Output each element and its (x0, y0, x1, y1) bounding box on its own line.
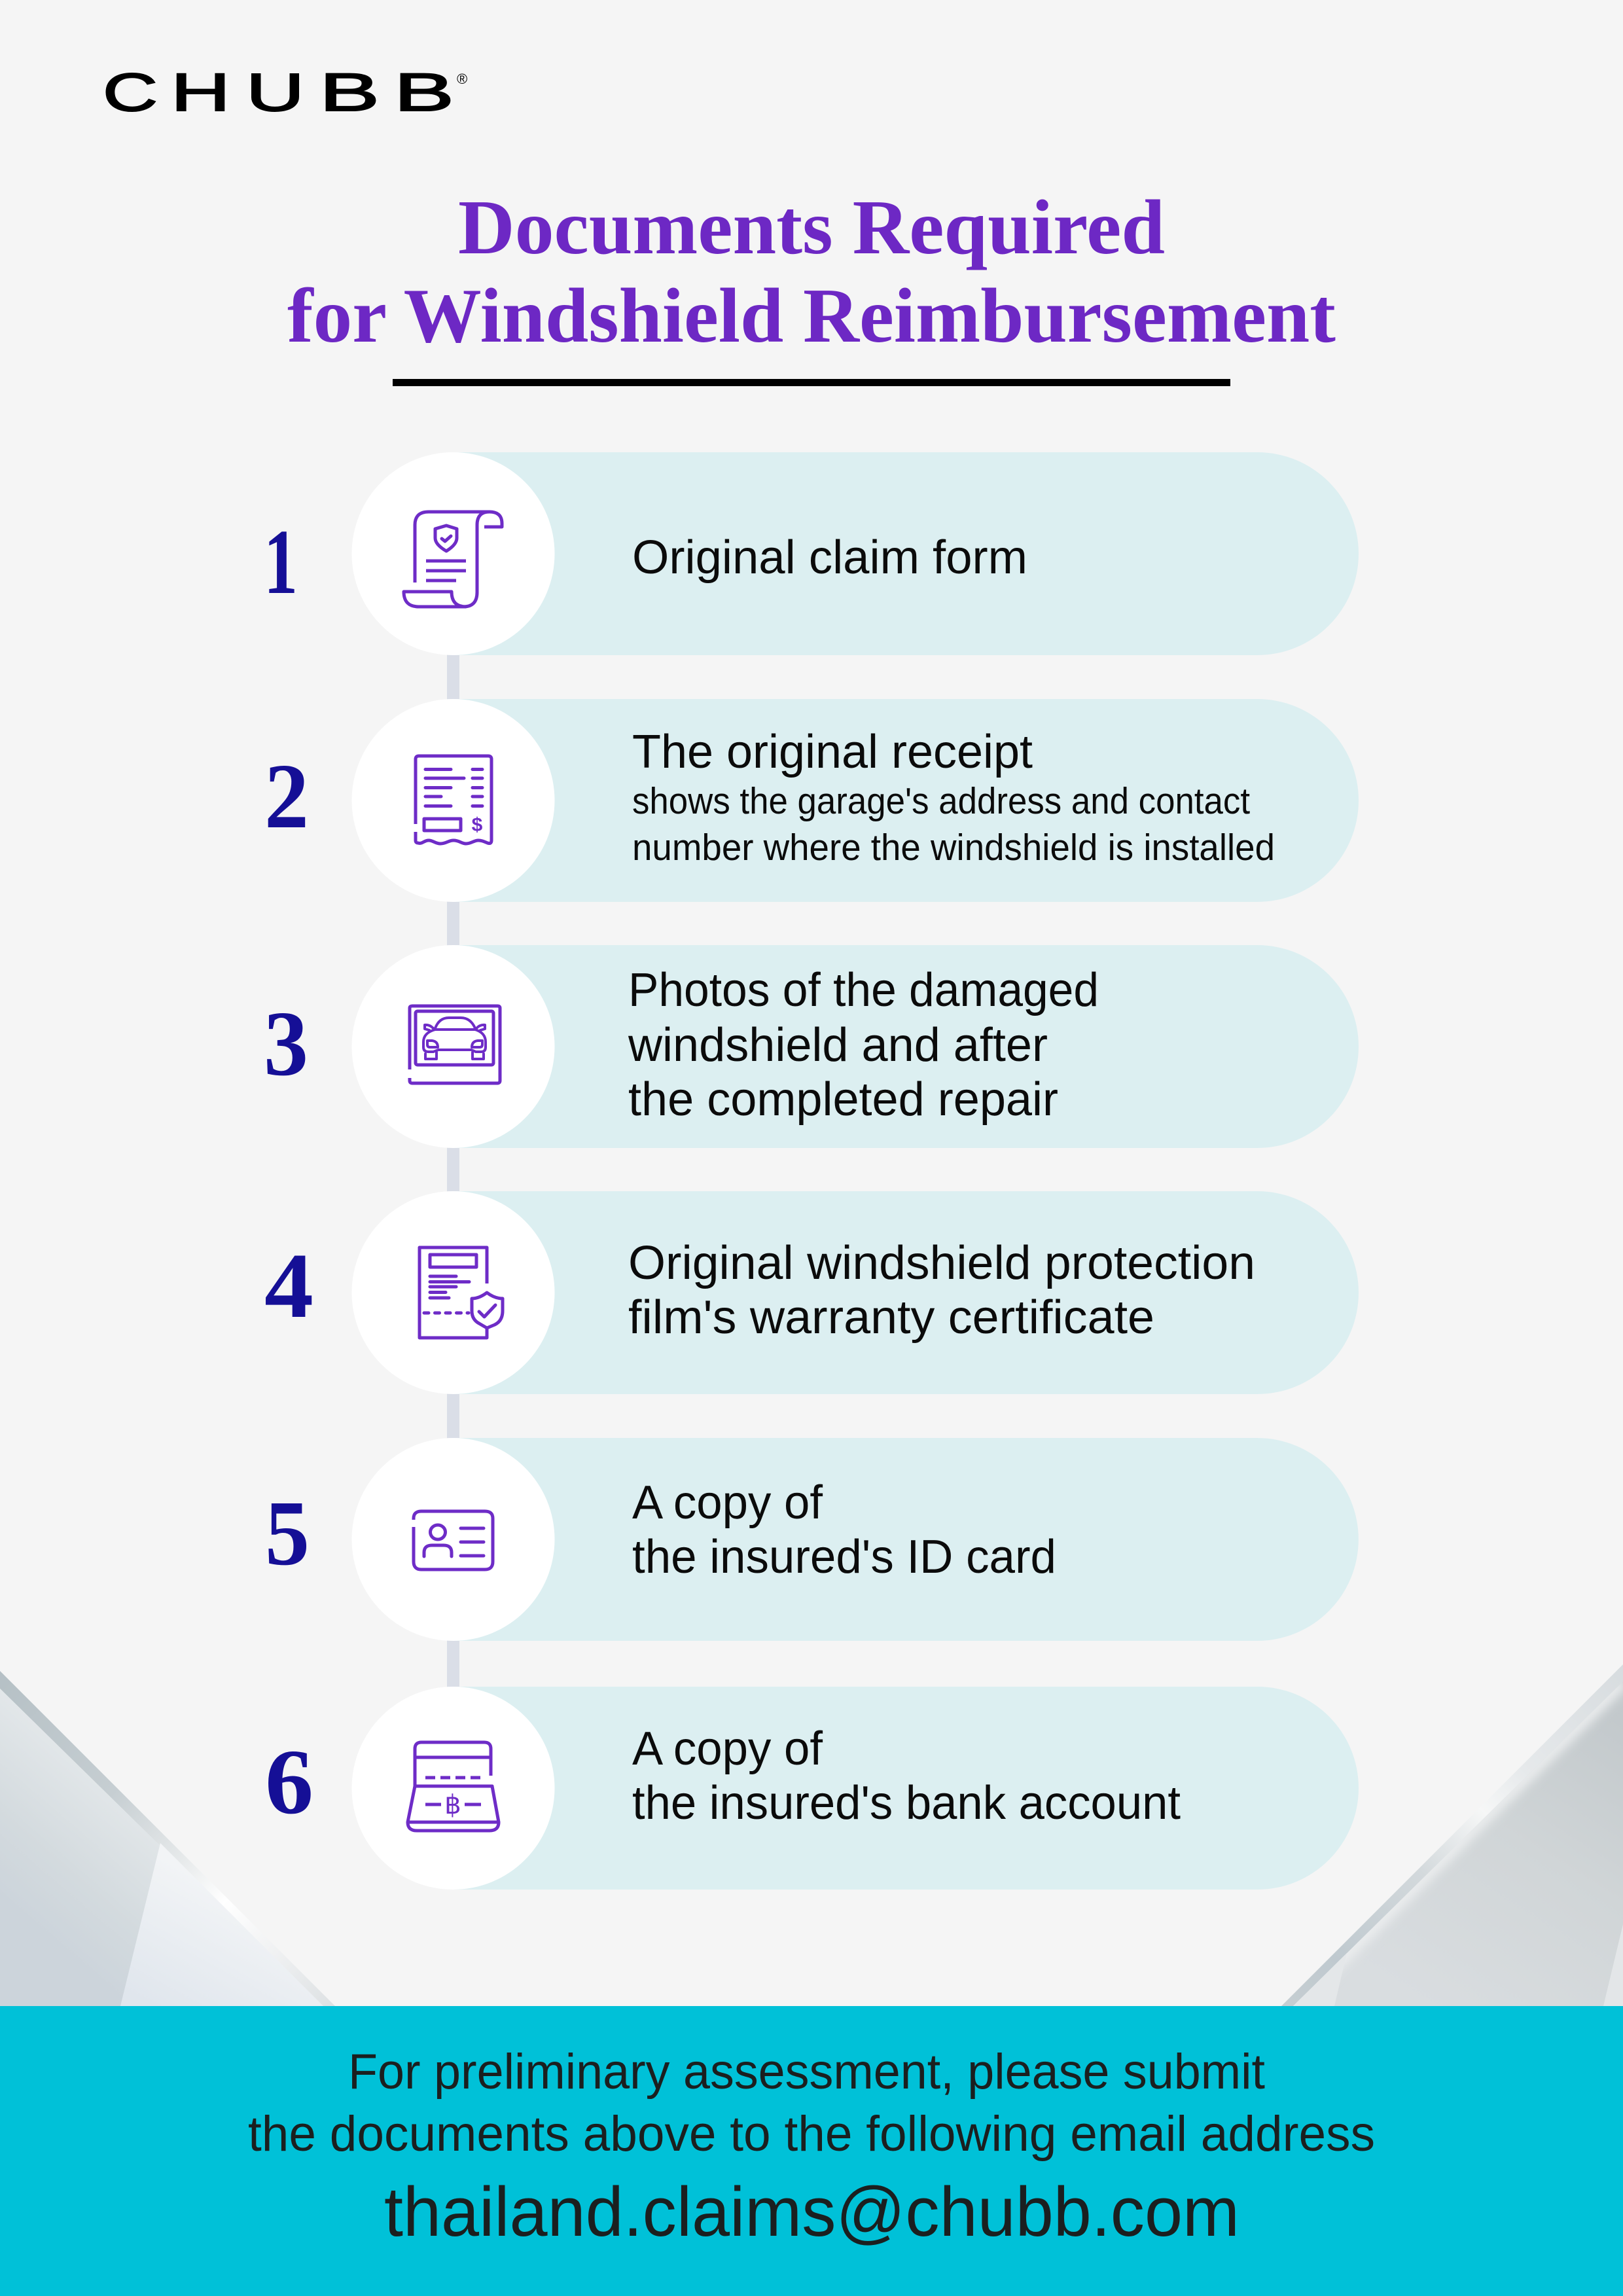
logo: Chubb: B (394, 63, 454, 122)
white icon circle (352, 699, 555, 902)
white icon circle (352, 1687, 555, 1890)
number 2: 2 (264, 744, 309, 848)
white icon circle (352, 1191, 555, 1394)
pill background (453, 1191, 1359, 1394)
text: original receipt: The original receipt (632, 726, 1033, 778)
email address: thailand.claims@chubb.com (384, 2172, 1240, 2251)
text: bank account (632, 1723, 1181, 1829)
logo: Chubb: C (103, 63, 158, 122)
timeline connector (447, 554, 459, 1788)
logo: Chubb (103, 63, 467, 122)
white icon circle (352, 452, 555, 655)
number 1: 1 (264, 510, 298, 613)
logo: Chubb: B (319, 63, 380, 122)
right corner decoration (1281, 1664, 1623, 2006)
footer text (248, 2044, 1375, 2162)
text: original receipt (632, 726, 1275, 869)
row 3: photos of windshield (264, 945, 1359, 1148)
text: bank account: the insured's bank account (632, 1777, 1181, 1829)
pill background (453, 1438, 1359, 1641)
text: photos of windshield: windshield and after (628, 1019, 1048, 1071)
row 4: warranty certificate (264, 1191, 1359, 1394)
text: warranty certificate: Original windshield protection (628, 1237, 1255, 1289)
row 6: bank account (265, 1687, 1359, 1890)
icon: bank book (408, 1742, 499, 1831)
text: warranty certificate (628, 1237, 1255, 1344)
white icon circle (352, 1438, 555, 1641)
row 5: ID card (265, 1438, 1359, 1641)
icon: scroll with shield (404, 512, 502, 607)
text: original claim form: Original claim form (632, 531, 1027, 584)
text: ID card: the insured's ID card (632, 1531, 1056, 1583)
text: bank account: A copy of (632, 1723, 823, 1775)
logo: Chubb: H (171, 63, 230, 122)
text: ID card (632, 1477, 1056, 1583)
text: ID card: A copy of (632, 1477, 823, 1529)
pill background (453, 1687, 1359, 1890)
icon: bank book: ฿ (444, 1790, 461, 1820)
title: Documents Required (458, 184, 1165, 270)
number 5: 5 (265, 1481, 310, 1585)
logo: Chubb: U (246, 63, 304, 122)
text: warranty certificate: film's warranty certificate (628, 1291, 1154, 1344)
title (287, 184, 1336, 359)
white icon circle (352, 945, 555, 1148)
icon: certificate with shield (419, 1247, 503, 1338)
number 6: 6 (265, 1730, 313, 1833)
icon: receipt (416, 756, 491, 844)
pill background (453, 945, 1359, 1148)
row 2: original receipt (264, 699, 1359, 902)
left corner decoration (0, 1671, 335, 2006)
title: for Windshield Reimbursement (287, 272, 1336, 359)
pill background (453, 699, 1359, 902)
text: original receipt: shows the garage's address and contact (632, 780, 1250, 822)
row 1: original claim form (264, 452, 1359, 655)
footer band (0, 2006, 1623, 2296)
text: photos of windshield: Photos of the damaged (628, 964, 1099, 1016)
footer text: the documents above to the following email address (248, 2106, 1375, 2162)
text: original receipt: number where the windshield is installed (632, 827, 1275, 869)
logo: Chubb: ® (457, 71, 467, 87)
text: photos of windshield: the completed repair (628, 1073, 1058, 1126)
number 4: 4 (264, 1234, 313, 1337)
icon: receipt: $ (472, 814, 483, 836)
number 3: 3 (264, 992, 308, 1095)
footer text: For preliminary assessment, please submit (348, 2044, 1265, 2100)
text: photos of windshield (628, 964, 1099, 1126)
icon: ID card (414, 1511, 493, 1570)
title underline (393, 379, 1230, 386)
pill background (453, 452, 1359, 655)
icon: car photo (410, 1006, 500, 1083)
